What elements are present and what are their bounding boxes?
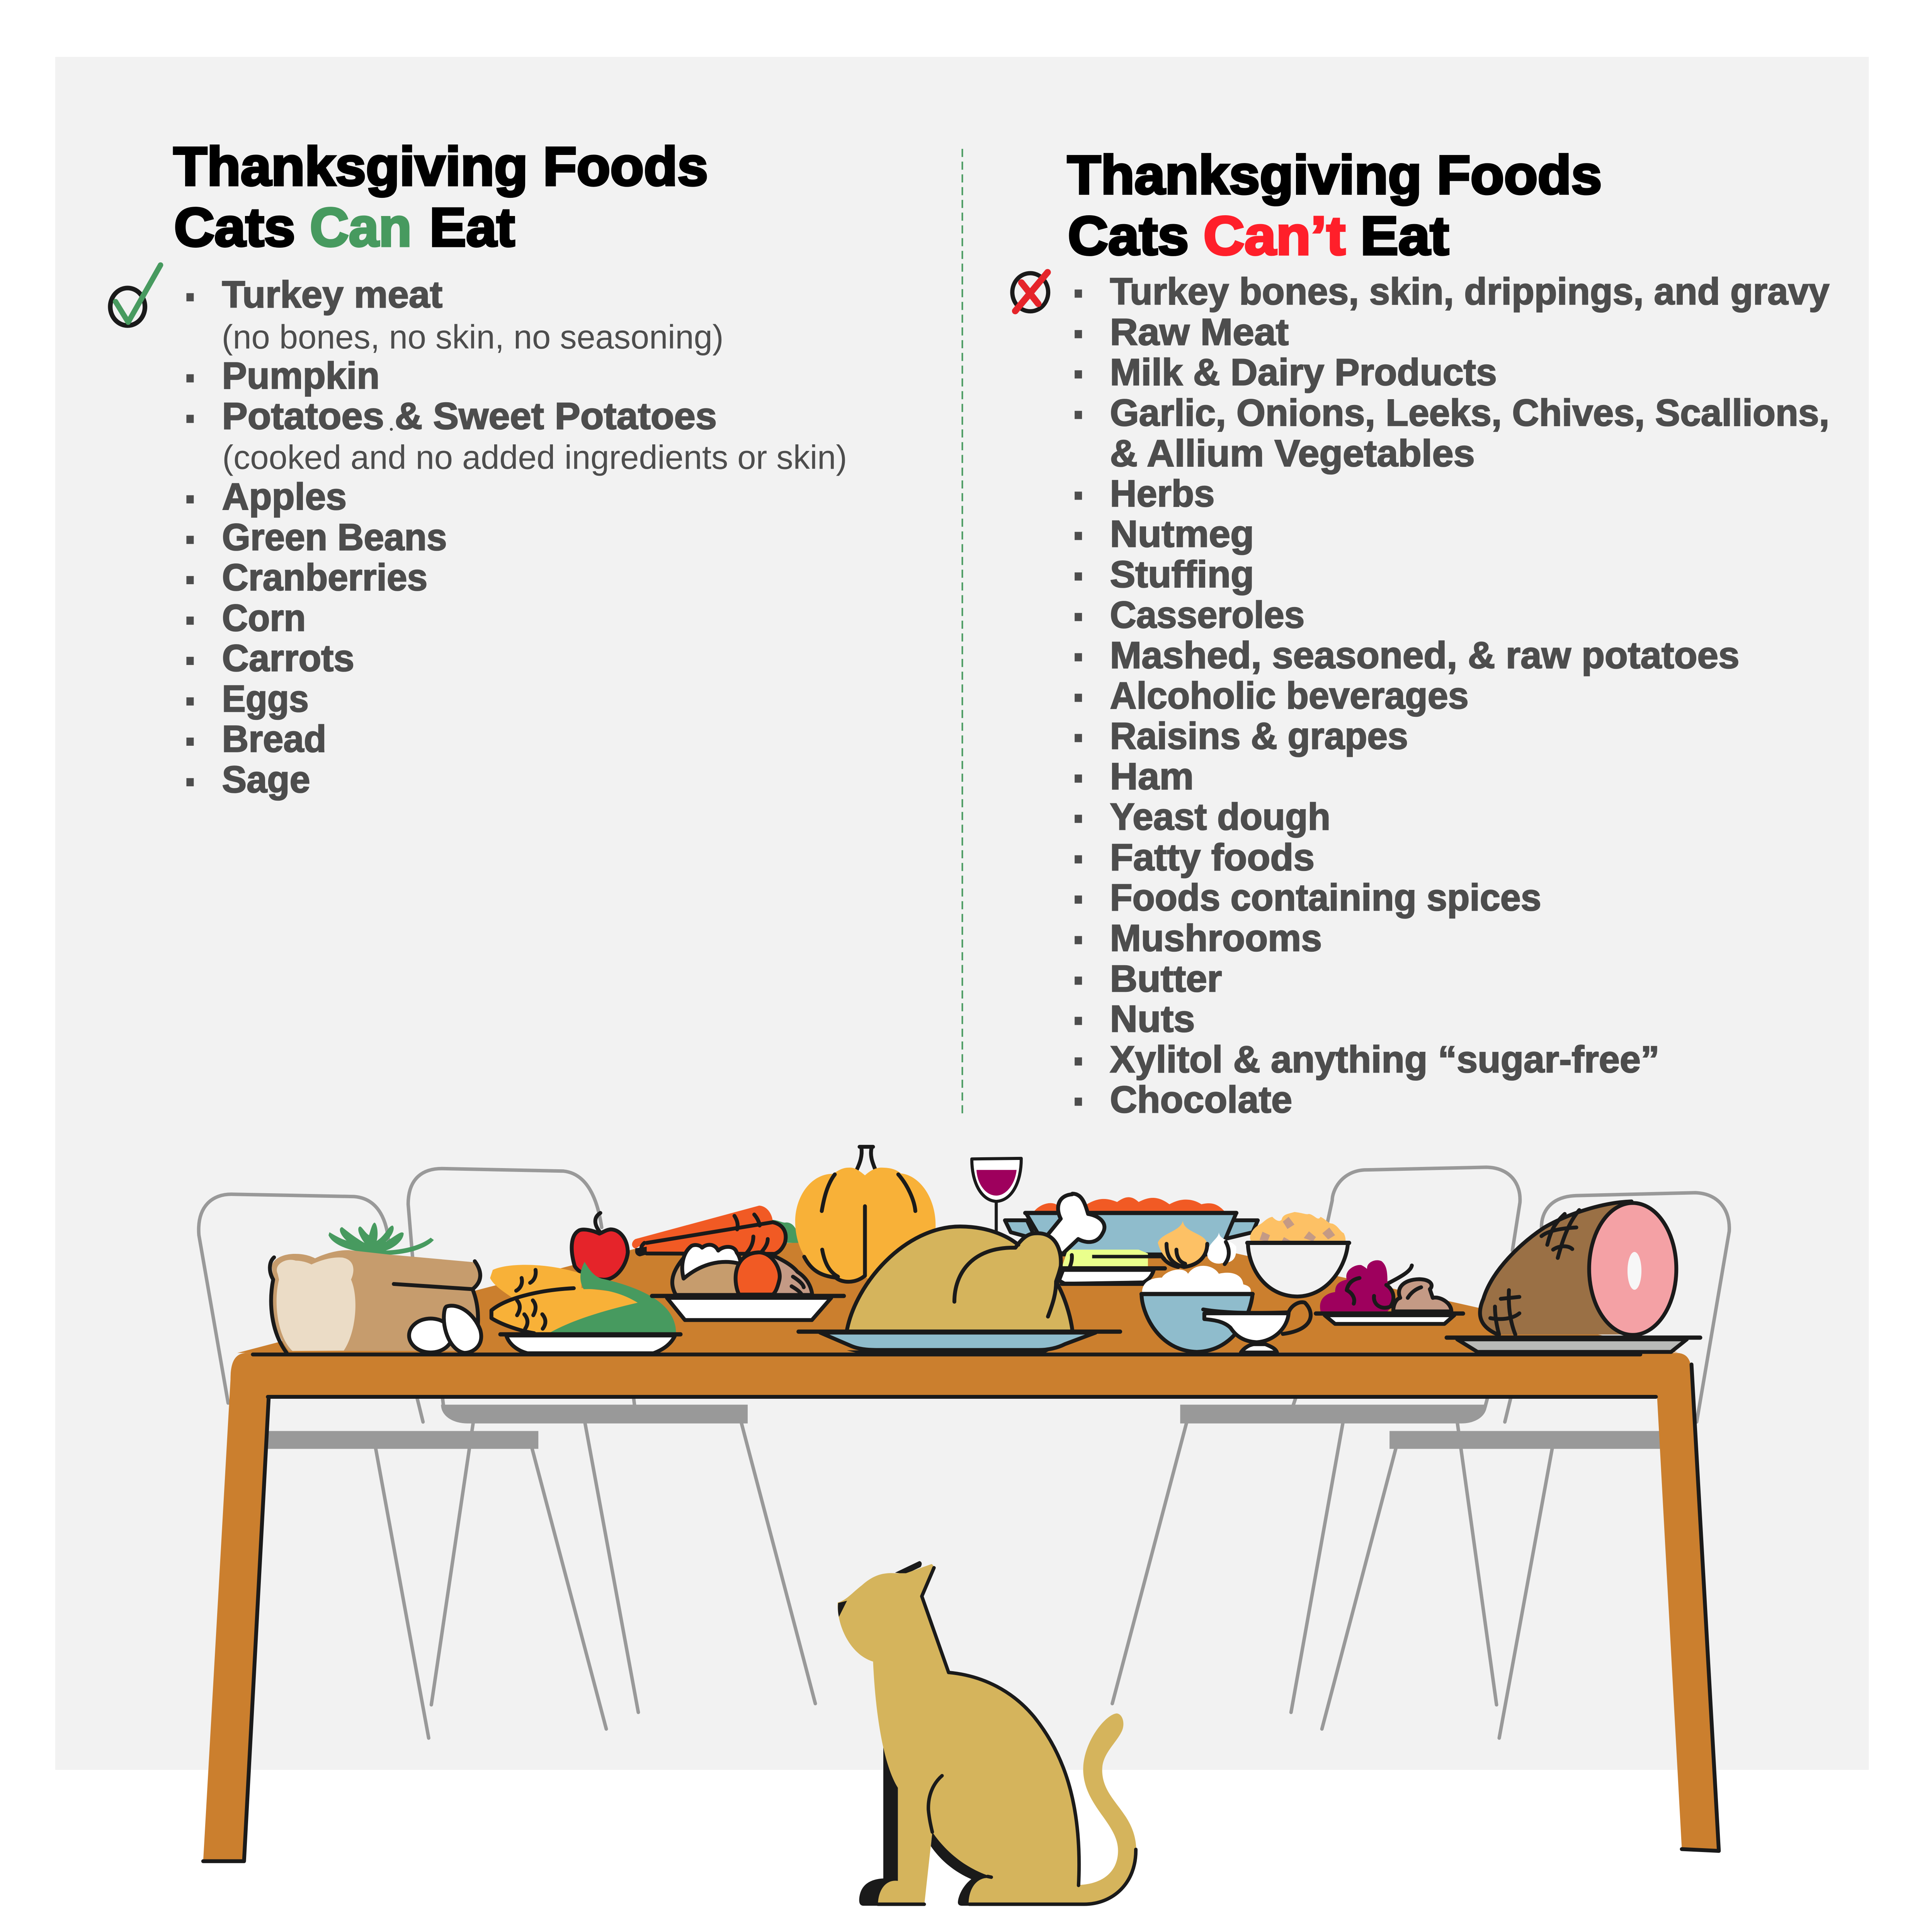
heading: foods cats can eat: [173, 136, 708, 258]
left chair outer: [199, 1194, 606, 1738]
list: foods cats can't eat: Raw Meat: [1110, 311, 1289, 353]
icon: green check mark: [110, 265, 160, 325]
list: foods cats can eat: (cooked and no added ingredients or skin): [222, 439, 847, 476]
list: foods cats can eat: Apples: [222, 476, 347, 518]
list: foods cats can't eat: Raisins & grapes: [1110, 715, 1408, 757]
list: foods cats can't eat: Nutmeg: [1110, 513, 1254, 555]
eggs: [409, 1306, 481, 1353]
list: foods cats can eat: Green Beans: [222, 516, 447, 558]
nuts and grapes on plate: [1316, 1260, 1463, 1324]
chairs: [199, 1167, 1729, 1738]
list: foods cats can eat: Turkey meat: [222, 274, 442, 316]
onion and garlic: [1158, 1221, 1236, 1267]
mashed potato bowl: [1141, 1266, 1253, 1352]
list: foods cats can't eat: Butter: [1110, 958, 1222, 1000]
list: foods cats can eat: Bread: [222, 718, 327, 760]
serving dish with sweet potatoes: [1005, 1197, 1258, 1255]
list: foods cats can't eat: Xylitol & anything “sugar-free”: [1110, 1039, 1660, 1080]
list: foods cats can't eat: & Allium Vegetables: [1110, 432, 1475, 474]
heading: foods cats can't eat: Can’t: [1203, 206, 1345, 266]
list: foods cats can eat: Cranberries: [222, 556, 427, 599]
table: [203, 1243, 1719, 1861]
list: foods cats can't eat: Foods containing spices: [1110, 877, 1541, 918]
list: foods cats can eat: Sage: [222, 759, 310, 801]
left chair inner: [408, 1168, 815, 1713]
heading: foods cats can eat: Thanksgiving Foods: [173, 136, 708, 197]
list: foods cats can eat: Potatoes & Sweet Potatoes: [222, 395, 717, 437]
list: foods cats can eat: Carrots: [222, 637, 354, 679]
heading: foods cats can't eat: Thanksgiving Foods: [1067, 145, 1602, 206]
roast turkey on platter: [799, 1226, 1120, 1353]
list: foods cats can't eat: Garlic, Onions, Leeks, Chives, Scallions,: [1110, 392, 1829, 434]
list: foods cats can't eat: Chocolate: [1110, 1079, 1292, 1121]
cat: [838, 1561, 1136, 1906]
heading: foods cats can't eat: Cats: [1068, 206, 1189, 266]
apple: [572, 1213, 628, 1280]
gravy boat: [1203, 1302, 1311, 1352]
icon: red x mark: [1012, 272, 1048, 311]
right chair inner: [1112, 1167, 1520, 1713]
butter dish: [1059, 1250, 1167, 1284]
list: foods cats can't eat: Turkey bones, skin, drippings, and gravy: [1110, 270, 1830, 313]
food group: right side of table: [799, 1158, 1700, 1353]
list: foods cats can't eat: Yeast dough: [1110, 796, 1330, 838]
herb sprig: sage: [328, 1223, 434, 1255]
right chair outer: [1322, 1193, 1729, 1738]
food group: left side of table: [270, 1147, 935, 1353]
list: foods cats can eat: (no bones, no skin, no seasoning): [222, 318, 724, 356]
heading: foods cats can't eat: Eat: [1361, 206, 1449, 266]
baked potato bowl: [652, 1245, 844, 1320]
list: foods cats can't eat: Stuffing: [1110, 554, 1254, 595]
list: foods cats can't eat: Fatty foods: [1110, 837, 1315, 878]
list: foods cats can eat: [186, 274, 847, 801]
table top band and legs: [203, 1353, 1719, 1861]
ham on platter: [1447, 1201, 1700, 1352]
list: foods cats can't eat: Nuts: [1110, 998, 1195, 1040]
list: foods cats can't eat: Alcoholic beverages: [1110, 675, 1469, 717]
heading: foods cats can eat: Can: [310, 197, 412, 258]
list: foods cats can't eat: Ham: [1110, 756, 1194, 798]
list: foods cats can't eat: [1075, 270, 1830, 1121]
bread loaf: [270, 1250, 480, 1353]
stuffing bowl: [1247, 1212, 1349, 1296]
list: foods cats can eat: Corn: [222, 597, 306, 639]
carrots: [632, 1206, 800, 1257]
heading: foods cats can eat: Eat: [430, 197, 515, 258]
heading: foods cats can't eat: [1067, 145, 1602, 266]
list: foods cats can't eat: Mushrooms: [1110, 917, 1322, 959]
list: foods cats can't eat: Casseroles: [1110, 594, 1304, 636]
list: foods cats can't eat: Mashed, seasoned, & raw potatoes: [1110, 634, 1740, 676]
pumpkin: [795, 1147, 935, 1282]
corn on plate: [490, 1262, 680, 1353]
list: foods cats can't eat: Herbs: [1110, 473, 1214, 515]
list: foods cats can eat: Pumpkin: [222, 355, 379, 397]
list: foods cats can't eat: Milk & Dairy Products: [1110, 351, 1497, 393]
wine glass: [972, 1158, 1021, 1235]
list: foods cats can eat: Eggs: [222, 678, 309, 720]
heading: foods cats can eat: Cats: [174, 197, 295, 258]
turkey bone: [1048, 1194, 1104, 1255]
